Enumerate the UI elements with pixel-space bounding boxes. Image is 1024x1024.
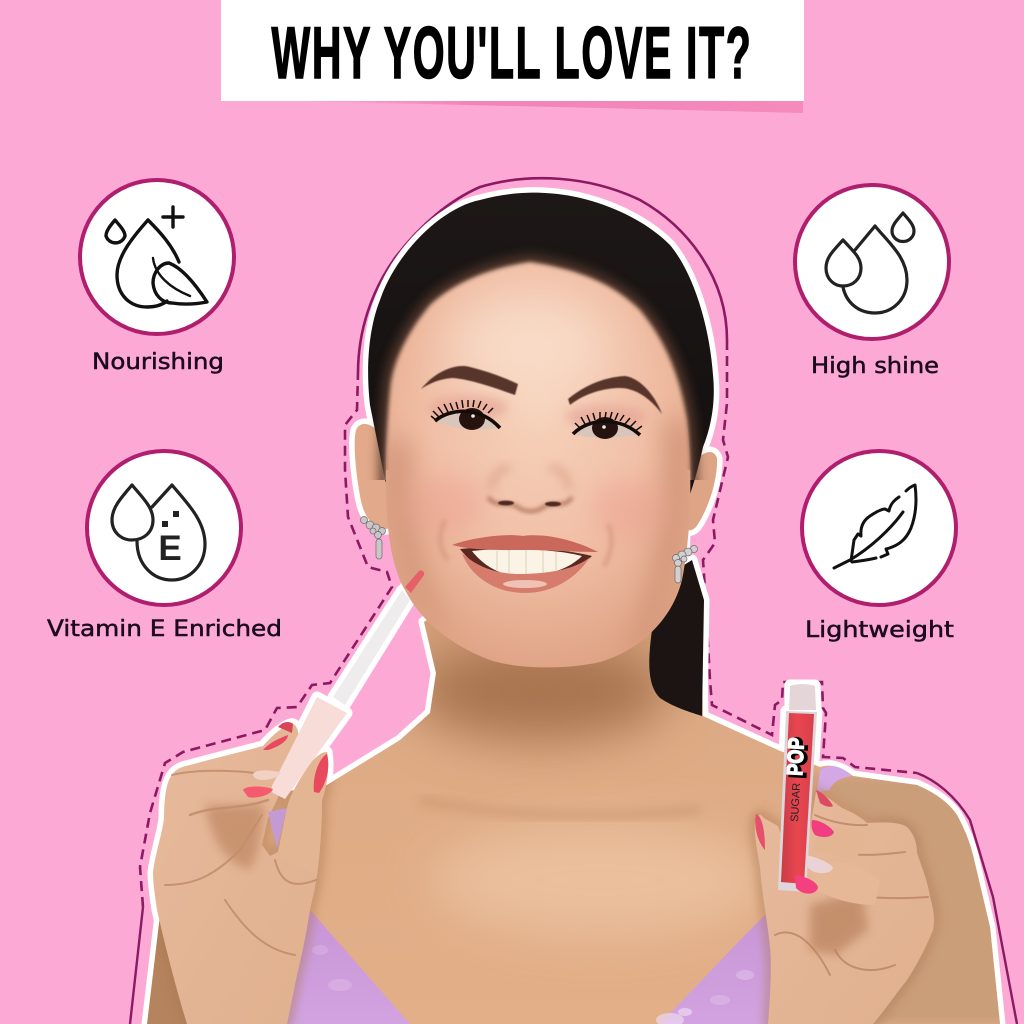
solid shoulder cut line [917,773,1017,1024]
icon: three drops [826,213,914,313]
icon circle [80,180,234,334]
face lower [386,470,690,668]
smile lines [440,520,611,566]
dashed cut line around model [140,373,392,907]
tube cap clear [789,684,816,710]
hair [368,193,714,610]
feature: Lightweight [802,451,956,643]
thumb [278,752,328,875]
label: Lightweight [805,618,954,643]
banner shadow [290,101,803,113]
face upper [382,259,694,480]
fingertips over tube [810,828,880,905]
icon letter E: E [158,529,182,568]
earring left [360,516,386,559]
left hand with applicator [153,570,424,1024]
feature: Nourishing [80,180,234,375]
icon circle [795,185,949,339]
nails [755,790,834,894]
title banner [221,0,804,113]
brand SUGAR: SUGAR [789,783,803,822]
right hand [755,684,934,1024]
dashed right cut line [703,340,917,773]
hand shading [165,771,316,955]
feature: High shine [795,185,949,379]
applicator cap [271,697,347,799]
dress right [660,910,775,1024]
label: Vitamin E Enriched [47,617,282,642]
palm shadow [810,890,868,955]
solid top cut line [358,178,727,373]
mouth [452,535,598,593]
solid lower-left cut line [130,907,143,1024]
body shading [147,640,1015,1024]
label: High shine [811,354,939,379]
icon circle [802,451,956,605]
hand [755,792,934,1024]
icon: feather [834,485,916,568]
lip gloss tube [778,684,817,892]
palm shadow [205,805,265,870]
ponytail [649,560,704,716]
strap [817,766,852,792]
hairline soft brown [371,250,706,480]
face shading [380,295,695,660]
tube body [778,711,817,892]
dress left [285,910,410,1024]
white sticker outline [147,193,1000,1024]
model [147,193,1015,1024]
feature: Vitamin E Enriched [47,451,282,642]
earring right [672,546,698,583]
icon: drop with leaf [106,207,207,307]
ears [355,424,390,529]
brand POP: POP [782,737,809,776]
gap between fingers [268,808,287,848]
eyebrows [421,366,662,414]
applicator wand [333,590,410,705]
applicator tip [405,570,424,593]
dress sparkle [312,945,754,1024]
eyes [428,396,646,439]
icon circle [87,451,241,605]
nose [488,410,572,511]
brand POP shadow: POP [785,737,812,778]
hand shadow on body [157,780,335,1024]
nails [243,722,328,798]
banner panel [221,0,804,101]
hand [153,724,328,1024]
body [147,590,1000,1024]
hand shadow on body [755,792,934,1024]
icon: drops with E [112,485,205,580]
finger lines [775,815,928,975]
label: Nourishing [92,350,224,375]
